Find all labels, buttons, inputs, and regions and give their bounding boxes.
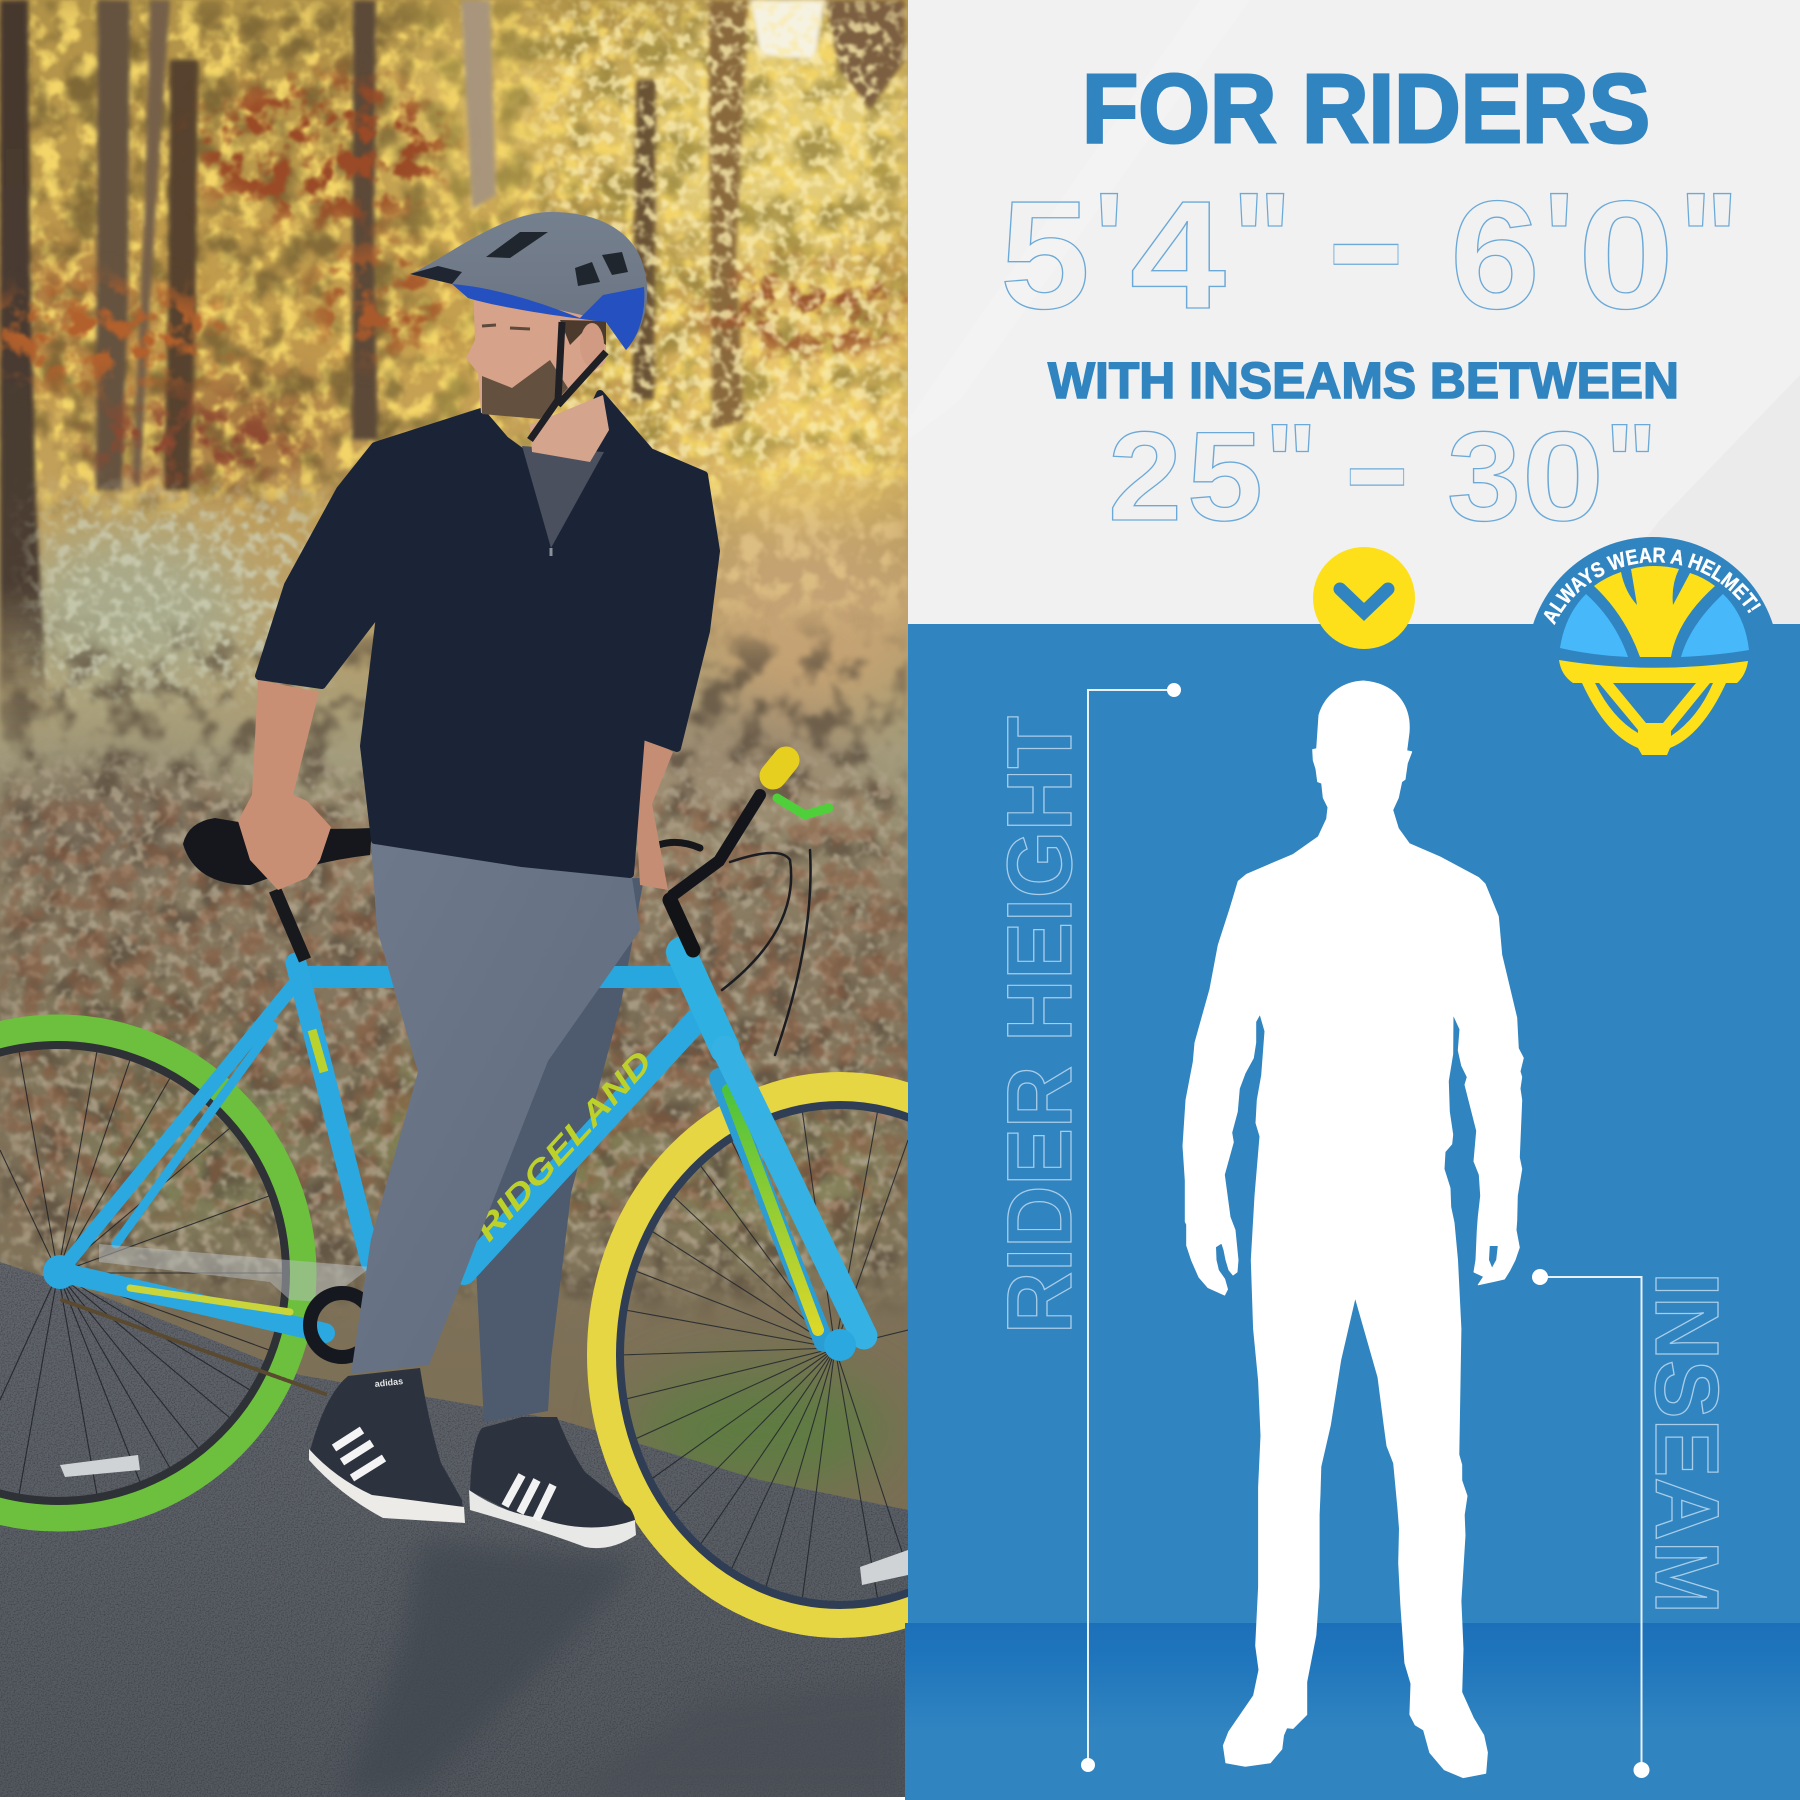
face bbox=[466, 285, 606, 419]
leader line: rider height bbox=[1081, 683, 1181, 1772]
pale highlights and ground leaves bbox=[0, 0, 908, 1280]
inseam range in outlined numerals: 2 bbox=[1108, 405, 1182, 547]
inseam range in outlined numerals: 3 bbox=[1447, 405, 1521, 547]
seat post bbox=[275, 890, 305, 960]
tree trunks bbox=[0, 0, 905, 730]
right forearm bbox=[635, 735, 673, 890]
panel: grey header background bbox=[908, 0, 1800, 624]
label: rider height: RIDER HEIGHT bbox=[989, 716, 1091, 1334]
rider: back leg bbox=[476, 878, 643, 1422]
zip bbox=[550, 548, 552, 556]
chainring and crank bbox=[310, 1293, 374, 1357]
inseam range in outlined numerals: " bbox=[1265, 401, 1317, 522]
asphalt path bbox=[0, 1262, 908, 1800]
shoe brand: adidas bbox=[374, 1376, 404, 1389]
panel: blue measurement background bbox=[905, 624, 1800, 1800]
height range in outlined numerals: 5 bbox=[1000, 169, 1090, 341]
brand lettering on the down tube: RIDGELAND bbox=[468, 1044, 659, 1248]
inseam range in outlined numerals: 5 bbox=[1187, 405, 1263, 547]
helmet shell centre bbox=[1594, 566, 1715, 657]
height range in outlined numerals: 0 bbox=[1578, 169, 1674, 341]
height range in outlined numerals: 4 bbox=[1130, 169, 1226, 341]
chain bbox=[62, 1300, 325, 1394]
height range in outlined numerals: ' bbox=[1544, 165, 1574, 311]
back shoe bbox=[469, 1417, 636, 1548]
ear and hair bbox=[560, 320, 606, 367]
figure: standing rider silhouette bbox=[1183, 681, 1523, 1778]
beard bbox=[482, 360, 568, 419]
front wheel bbox=[587, 1072, 908, 1638]
inseam range in outlined numerals bbox=[1108, 373, 1657, 556]
photo: rider leaning on a bicycle in autumn woods bbox=[0, 0, 908, 1797]
heading: for riders: FOR RIDERS bbox=[1082, 54, 1650, 163]
leader line: inseam bbox=[1532, 1269, 1650, 1778]
seat tube decal bbox=[312, 1030, 324, 1072]
height range in outlined numerals: " bbox=[1232, 165, 1292, 311]
saddle bbox=[183, 818, 372, 885]
chain guard bbox=[99, 1244, 371, 1302]
badge: always wear a helmet bbox=[1533, 537, 1773, 755]
eye and brow bbox=[482, 325, 530, 329]
navy pullover bbox=[259, 394, 716, 874]
photo bottom edge bbox=[0, 1797, 908, 1800]
henley collar bbox=[522, 446, 604, 548]
height range in outlined numerals: – bbox=[1330, 128, 1402, 351]
left forearm and hand bbox=[238, 680, 331, 890]
chin strap bbox=[530, 322, 606, 440]
helmet rim and straps bbox=[1559, 660, 1748, 755]
helmet shell side panels bbox=[1560, 594, 1749, 657]
rust leaf clusters bbox=[0, 75, 920, 478]
rear wheel bbox=[0, 1028, 303, 1518]
neck bbox=[530, 395, 609, 462]
icon: yellow chevron button bbox=[1313, 547, 1415, 649]
badge text: ALWAYS WEAR A HELMET! bbox=[1544, 548, 1762, 626]
inseam range in outlined numerals: – bbox=[1347, 373, 1407, 556]
inseam range in outlined numerals: " bbox=[1605, 401, 1657, 522]
front reflector bbox=[860, 1550, 908, 1585]
subheading: with inseams between: WITH INSEAMS BETWEEN bbox=[1048, 352, 1679, 409]
rear reflector bbox=[60, 1455, 140, 1477]
yellow foliage mottling bbox=[0, 0, 908, 610]
dark foliage shadow mottling bbox=[0, 0, 908, 1300]
height range in outlined numerals: 6 bbox=[1450, 169, 1540, 341]
height range in outlined numerals bbox=[1000, 128, 1739, 351]
label: inseam: INSEAM bbox=[1636, 1272, 1736, 1614]
front shoe bbox=[309, 1368, 465, 1523]
inseam range in outlined numerals: 0 bbox=[1522, 405, 1604, 547]
soft background tones bbox=[0, 10, 930, 1490]
height range in outlined numerals: ' bbox=[1094, 165, 1124, 311]
bicycle frame bbox=[43, 952, 864, 1394]
helmet bbox=[410, 212, 647, 350]
rider: front leg bbox=[351, 842, 640, 1374]
height range in outlined numerals: " bbox=[1679, 165, 1739, 311]
handlebar, stem and cables bbox=[644, 760, 829, 1055]
